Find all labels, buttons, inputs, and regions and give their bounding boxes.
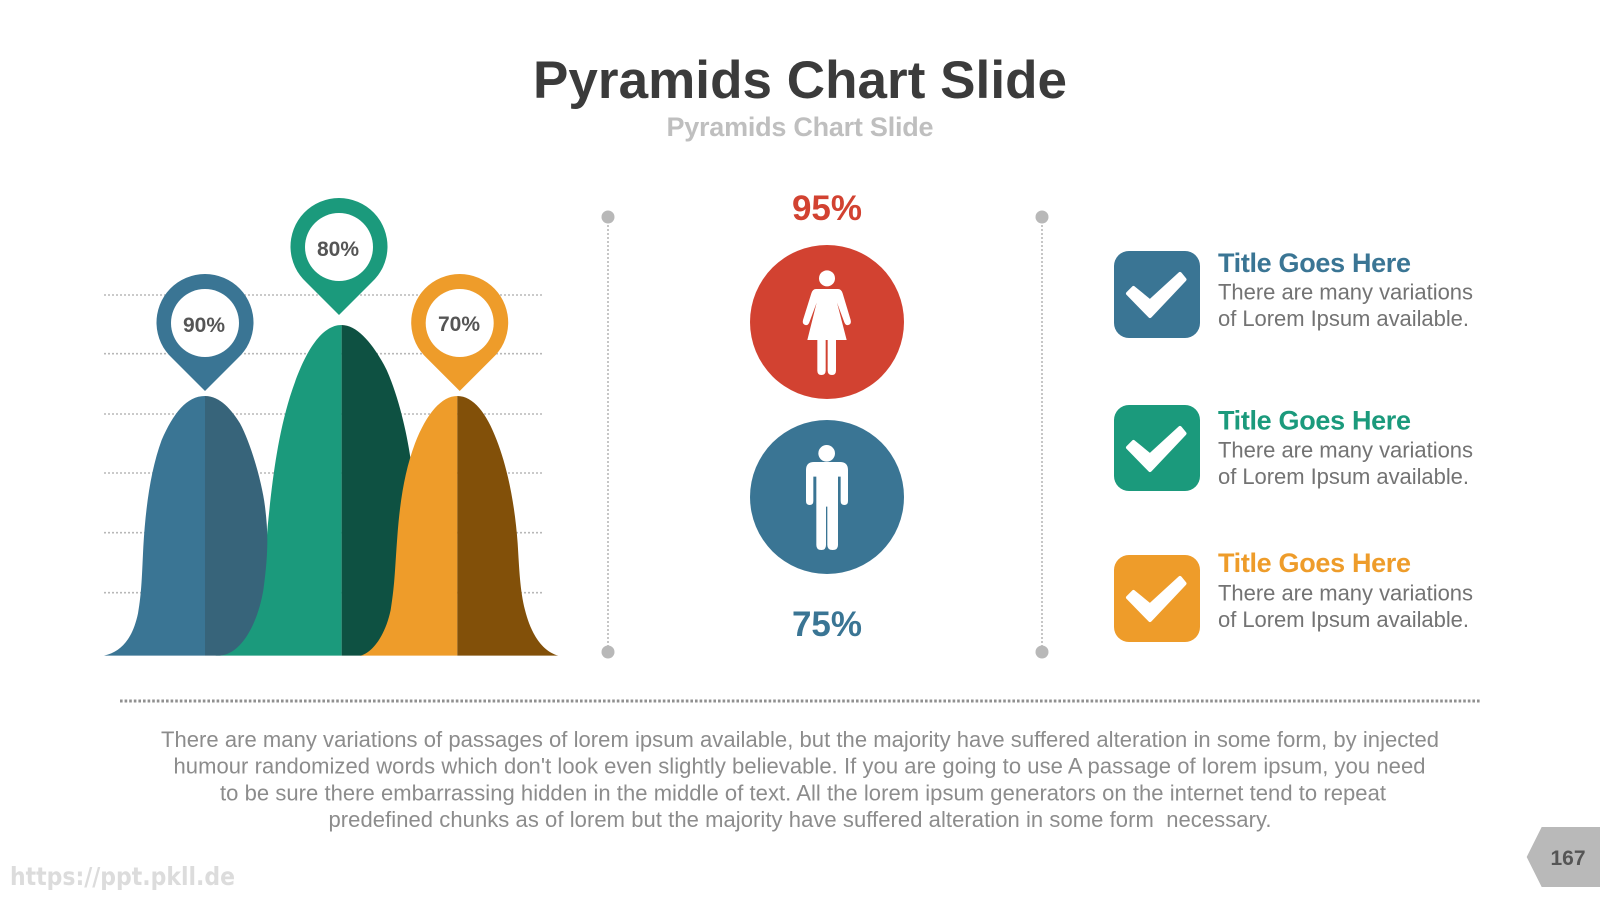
item text: There are many variations <box>1218 438 1473 462</box>
item text: of Lorem Ipsum available. <box>1218 607 1469 632</box>
panel: checklist item 1 <box>1114 248 1473 338</box>
item title: Title Goes Here <box>1218 548 1411 578</box>
bell: blue 90% <box>104 396 267 656</box>
item text: of Lorem Ipsum available. <box>1218 464 1469 489</box>
pin: green 80%: 80% <box>317 238 359 261</box>
bell: green 80% <box>213 325 415 656</box>
pin: blue 90% <box>156 274 253 391</box>
circle: male <box>750 420 904 574</box>
divider right <box>1036 210 1048 658</box>
item text: There are many variations <box>1218 580 1473 606</box>
label: 95%: 95% <box>792 189 862 228</box>
pin: green 80% <box>290 198 387 315</box>
page number tab <box>1527 827 1600 887</box>
icon: woman <box>803 270 851 375</box>
icon: blue check box <box>1114 251 1200 338</box>
pin: orange 70%: 70% <box>438 313 480 336</box>
item title: Title Goes Here <box>1218 406 1411 436</box>
icon: green check box <box>1114 405 1200 491</box>
body paragraph: There are many variations of passages of lorem ipsum available, but the majority have suffered alteration in some form, by injected <box>161 727 1439 752</box>
panel: checklist item 3 <box>1114 548 1473 642</box>
pin: blue 90%: 90% <box>183 314 225 337</box>
body paragraph: humour randomized words which don't look even slightly believable. If you are going to use A passage of lorem ipsum, you need <box>174 754 1426 778</box>
bell: orange 70% <box>360 396 558 656</box>
circle: female <box>750 245 904 399</box>
pin: orange 70% <box>411 274 508 391</box>
icon: man <box>806 445 848 550</box>
item text: of Lorem Ipsum available. <box>1218 306 1469 331</box>
item text: There are many variations <box>1218 280 1473 304</box>
title: Pyramids Chart Slide <box>533 51 1067 110</box>
label: 75%: 75% <box>792 605 862 644</box>
subtitle: Pyramids Chart Slide <box>666 112 934 142</box>
page number tab: 167 <box>1550 847 1586 870</box>
divider horizontal <box>120 700 1480 702</box>
item title: Title Goes Here <box>1218 248 1411 278</box>
panel: pyramid bell chart <box>104 198 558 656</box>
divider left <box>602 210 614 658</box>
watermark: https://ppt.pkll.de <box>10 862 235 891</box>
body paragraph: predefined chunks as of lorem but the majority have suffered alteration in some form necessary. <box>328 807 1272 832</box>
icon: orange check box <box>1114 555 1200 642</box>
body paragraph: to be sure there embarrassing hidden in the middle of text. All the lorem ipsum generators on the internet tend to repeat <box>220 780 1386 806</box>
panel: gender stats <box>750 189 904 644</box>
panel: checklist item 2 <box>1114 405 1473 491</box>
